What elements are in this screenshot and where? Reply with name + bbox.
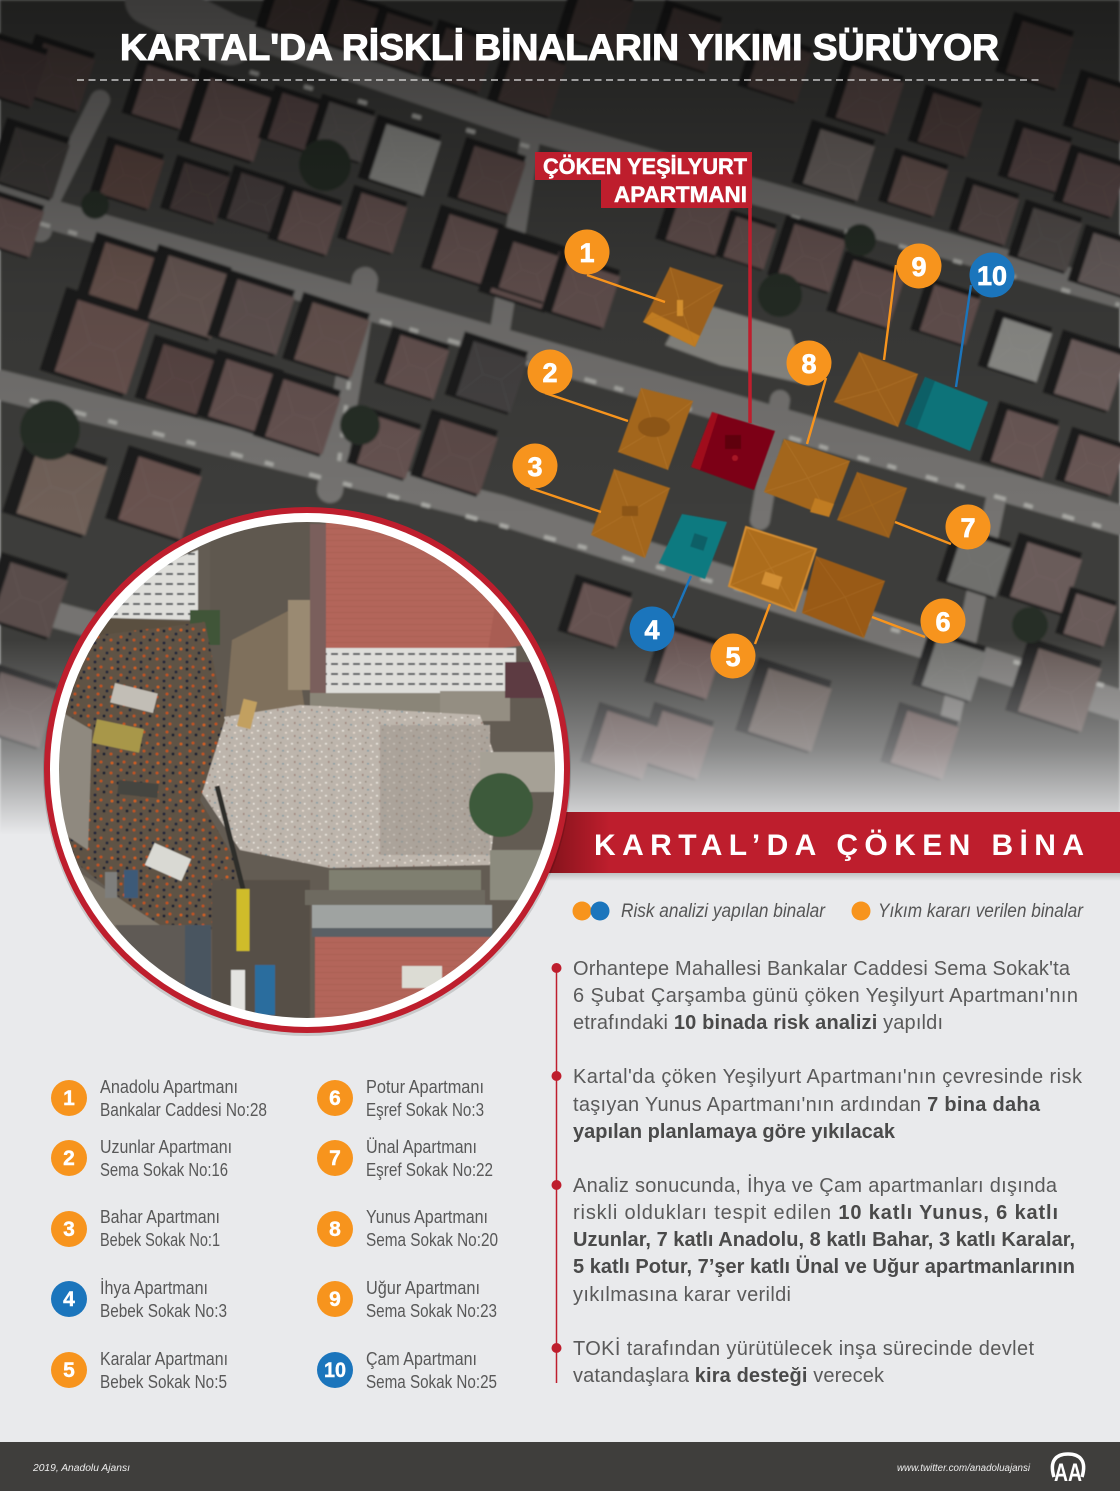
callout: collapsed Yeşilyurt building: APARTMANI xyxy=(614,182,747,207)
text block 1: etrafındaki 10 binada risk analizi yapıldı xyxy=(573,1012,943,1034)
building list: right column: 8 xyxy=(329,1218,341,1241)
photo: red roof xyxy=(326,520,496,648)
map markers: 2 xyxy=(542,358,558,388)
text block 3: Analiz sonucunda, İhya ve Çam apartmanları dışında xyxy=(573,1174,1058,1197)
building list: left column: İhya Apartmanı xyxy=(100,1278,208,1298)
building list: right column: 9 xyxy=(329,1288,341,1311)
top dark overlay xyxy=(0,0,1120,520)
text block 1: 6 Şubat Çarşamba günü çöken Yeşilyurt Apartmanı'nın xyxy=(573,985,1078,1007)
callout: collapsed Yeşilyurt building: ÇÖKEN YEŞİLYURT xyxy=(543,154,748,179)
map markers: 7 xyxy=(960,513,976,543)
building list: left column: Bebek Sokak No:3 xyxy=(100,1301,227,1321)
building 5 xyxy=(729,527,816,611)
building 6 xyxy=(802,556,885,638)
map markers: 9 xyxy=(911,252,927,282)
text block 2: yapılan planlamaya göre yıkılacak xyxy=(573,1121,896,1143)
building list: left column: Anadolu Apartmanı xyxy=(100,1077,238,1097)
building list: right column: 7 xyxy=(329,1147,341,1170)
highlighted buildings xyxy=(591,267,988,638)
building list: left column: 5 xyxy=(63,1359,75,1382)
text block 3 xyxy=(573,1174,1075,1306)
building 7 xyxy=(837,472,907,538)
text block 3: 5 katlı Potur, 7’şer katlı Ünal ve Uğur apartmanlarının xyxy=(573,1255,1075,1278)
building list: right column: Uğur Apartmanı xyxy=(366,1278,480,1298)
building 4 xyxy=(659,514,727,579)
building list: left column: 1 xyxy=(63,1087,75,1110)
building list: left column: Bebek Sokak No:1 xyxy=(100,1230,220,1250)
circular photo of the collapse site xyxy=(43,507,571,1036)
building list: right column: Eşref Sokak No:3 xyxy=(366,1100,484,1120)
building list: right column: Çam Apartmanı xyxy=(366,1349,477,1369)
building 10 xyxy=(905,377,988,451)
text block 4: TOKİ tarafından yürütülecek inşa sürecinde devlet xyxy=(573,1337,1034,1360)
building list: left column: 4 xyxy=(63,1288,75,1311)
timeline rule and bullets xyxy=(552,963,562,1383)
building list: right column xyxy=(317,1077,498,1392)
text block 4: vatandaşlara kira desteği verecek xyxy=(573,1365,885,1387)
map markers: 3 xyxy=(527,452,543,482)
map markers: 1 xyxy=(579,238,595,268)
icon: Anadolu Agency logo xyxy=(1052,1454,1084,1487)
building list: right column: Yunus Apartmanı xyxy=(366,1207,488,1227)
building list: left column: Bankalar Caddesi No:28 xyxy=(100,1100,267,1120)
building list: right column: 6 xyxy=(329,1087,341,1110)
building list: right column: Eşref Sokak No:22 xyxy=(366,1160,493,1180)
text block 1 xyxy=(573,958,1078,1034)
building 8 xyxy=(764,439,850,517)
map markers: 6 xyxy=(935,607,951,637)
photo: bottom building xyxy=(312,905,492,931)
map markers: 5 xyxy=(725,642,741,672)
photo: white apartment top left xyxy=(110,550,198,620)
photo: vehicles xyxy=(110,683,158,713)
text block 2 xyxy=(573,1066,1083,1143)
photo: street top xyxy=(210,520,310,710)
aerial map background xyxy=(0,0,1120,846)
text block 2: taşıyan Yunus Apartmanı'nın ardından 7 bina daha xyxy=(573,1094,1041,1116)
footer bar: www.twitter.com/anadoluajansi xyxy=(897,1463,1031,1474)
text block 3: yıkılmasına karar verildi xyxy=(573,1284,791,1306)
building list: left column: Uzunlar Apartmanı xyxy=(100,1137,232,1157)
icon: Anadolu Agency logo: AA xyxy=(1054,1459,1082,1487)
map markers xyxy=(512,230,1014,678)
photo: facade xyxy=(326,648,516,693)
legend: colour key: Risk analizi yapılan binalar xyxy=(621,901,826,922)
text block 3: Uzunlar, 7 katlı Anadolu, 8 katlı Bahar, 3 katlı Karalar, xyxy=(573,1229,1075,1251)
building list: right column: Ünal Apartmanı xyxy=(366,1137,477,1157)
building list: right column: Sema Sokak No:23 xyxy=(366,1301,497,1321)
building 1 xyxy=(643,267,723,347)
photo: rubble xyxy=(200,705,500,868)
map markers: 10 xyxy=(977,261,1007,291)
building list: left column: 3 xyxy=(63,1218,75,1241)
building list: right column: 10 xyxy=(324,1359,346,1382)
photo: walls xyxy=(310,692,440,713)
text block 1: Orhantepe Mahallesi Bankalar Caddesi Sema Sokak'ta xyxy=(573,958,1071,980)
legend: colour key: Yıkım kararı verilen binalar xyxy=(878,901,1084,922)
text block 3: riskli oldukları tespit edilen 10 katlı Yunus, 6 katlı xyxy=(573,1202,1058,1224)
photo: street bottom xyxy=(212,880,310,1020)
connector lines xyxy=(530,265,971,644)
footer bar xyxy=(0,1442,1120,1491)
photo: lower wall xyxy=(329,870,481,891)
building 9 xyxy=(834,352,918,427)
text block 2: Kartal'da çöken Yeşilyurt Apartmanı'nın çevresinde risk xyxy=(573,1066,1083,1088)
collapsed building xyxy=(691,412,775,490)
building list: right column: Sema Sokak No:25 xyxy=(366,1372,497,1392)
building 3 xyxy=(591,469,670,558)
title: KARTAL'DA RİSKLİ BİNALARIN YIKIMI SÜRÜYOR xyxy=(120,27,999,68)
text block 4 xyxy=(573,1337,1034,1387)
callout: collapsed Yeşilyurt building xyxy=(535,152,752,423)
building list: left column: Bebek Sokak No:5 xyxy=(100,1372,227,1392)
building list: left column: Karalar Apartmanı xyxy=(100,1349,228,1369)
photo: bottom left buildings xyxy=(115,924,185,953)
building list: right column: Sema Sokak No:20 xyxy=(366,1230,498,1250)
legend: colour key xyxy=(572,901,1084,922)
red section band: KARTAL’DA ÇÖKEN BİNA xyxy=(594,829,1084,862)
building list: left column: Sema Sokak No:16 xyxy=(100,1160,228,1180)
map markers: 8 xyxy=(801,349,817,379)
building list: right column: Potur Apartmanı xyxy=(366,1077,484,1097)
red section band xyxy=(540,812,1120,881)
building list: left column: Bahar Apartmanı xyxy=(100,1207,220,1227)
building list: left column xyxy=(51,1077,267,1392)
photo: crowd xyxy=(60,622,240,930)
bottom fade xyxy=(0,640,1120,835)
photo: tree xyxy=(469,773,533,837)
building 2 xyxy=(618,388,693,470)
footer bar: 2019, Anadolu Ajansı xyxy=(32,1463,130,1474)
map markers: 4 xyxy=(644,615,660,645)
building list: left column: 2 xyxy=(63,1147,75,1170)
